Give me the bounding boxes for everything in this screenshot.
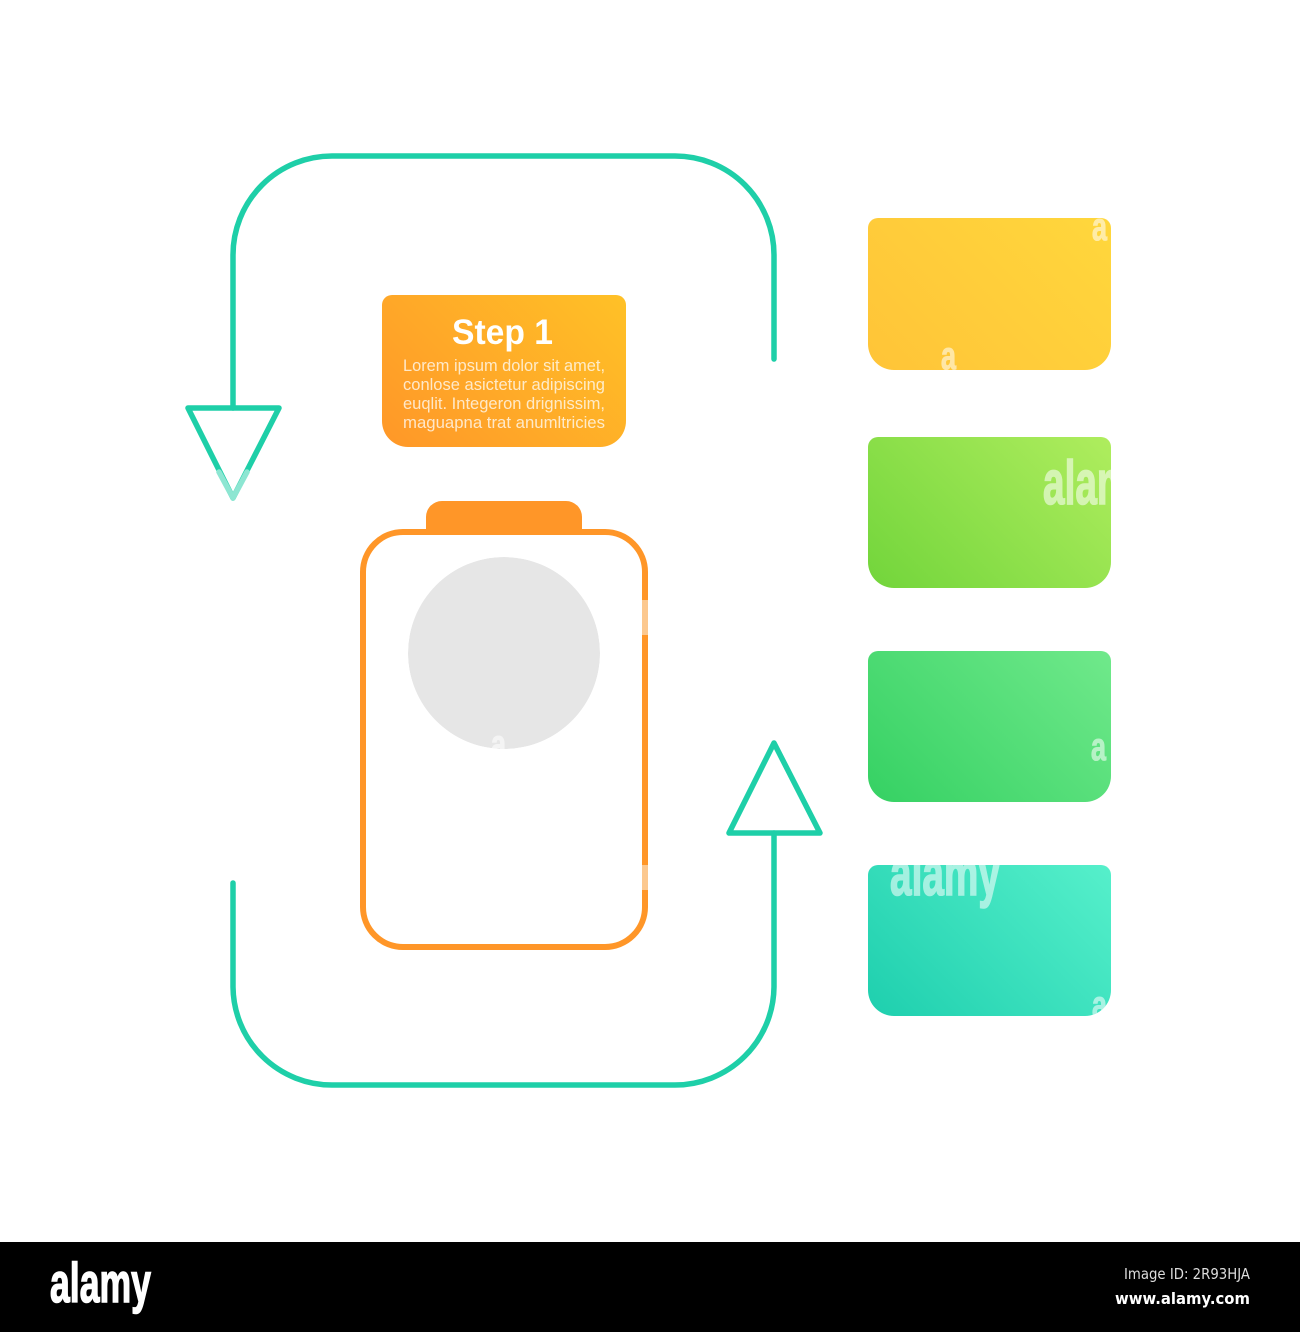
yellow card: a bbox=[941, 335, 956, 378]
green card: a bbox=[1091, 726, 1106, 769]
teal card: a bbox=[1092, 984, 1107, 1027]
grey circle icon placeholder bbox=[408, 557, 600, 766]
teal card bbox=[868, 865, 1111, 1016]
outlined container with tab bbox=[363, 501, 648, 947]
step 1 label box: maguapna trat anumltricies bbox=[403, 414, 605, 432]
footer logo: alamy bbox=[50, 1251, 151, 1314]
website: www.alamy.com bbox=[1115, 1289, 1250, 1308]
lime green card bbox=[868, 437, 1111, 588]
cycle arrow: bottom, pointing up on the right bbox=[233, 743, 820, 1085]
teal card: alamy bbox=[890, 840, 1000, 909]
cycle arrow: top, pointing down on the left bbox=[188, 156, 774, 498]
footer bar bbox=[0, 1242, 1300, 1332]
step 1 label box: Step 1 bbox=[452, 313, 553, 352]
green card bbox=[868, 651, 1111, 802]
lime green card: alamy bbox=[1043, 449, 1153, 518]
step 1 label box: Lorem ipsum dolor sit amet, bbox=[403, 357, 605, 375]
yellow card: a bbox=[1092, 206, 1107, 249]
step 1 label box bbox=[382, 295, 626, 447]
step 1 label box: conlose asictetur adipiscing bbox=[403, 376, 605, 394]
step 1 label box: euqlit. Integeron drignissim, bbox=[403, 395, 605, 413]
image id: Image ID: 2R93HJA bbox=[1124, 1265, 1251, 1283]
yellow card bbox=[868, 218, 1111, 370]
grey circle icon placeholder: a bbox=[491, 723, 506, 766]
